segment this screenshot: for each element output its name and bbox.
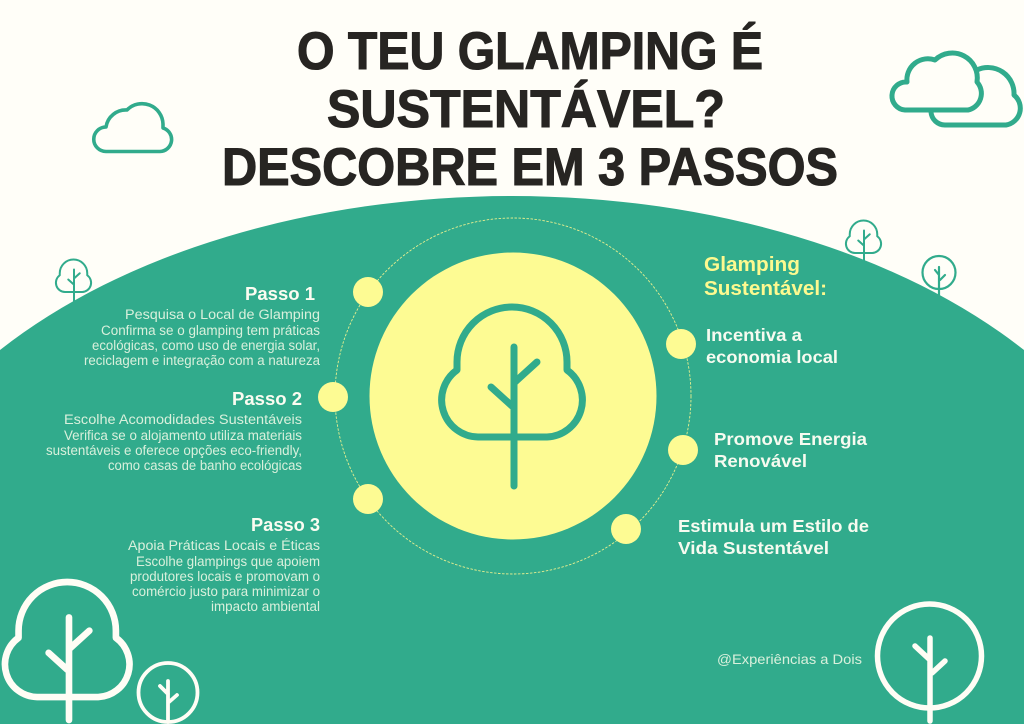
text block: passo 3: impacto ambiental xyxy=(211,599,320,614)
text block: passo 2: como casas de banho ecológicas xyxy=(108,458,302,473)
text block: passo 2: Verifica se o alojamento utiliza materiais xyxy=(64,428,302,443)
icon: small tree on hill left xyxy=(56,260,91,304)
text block: passo 1 xyxy=(84,284,320,368)
benefit: economia local: Incentiva a xyxy=(706,325,802,345)
icon: round tree on hill right xyxy=(922,256,956,297)
text block: passo 2: Escolhe Acomodidades Sustentáveis xyxy=(64,412,302,427)
benefit: energia renovável: Promove Energia xyxy=(714,429,867,449)
step markers xyxy=(318,277,383,514)
icon: small round tree bottom left xyxy=(138,663,198,722)
benefit: energia renovável: Renovável xyxy=(714,451,807,471)
benefit: estilo de vida: Estimula um Estilo de xyxy=(678,516,869,536)
benefit: estilo de vida: Vida Sustentável xyxy=(678,538,829,558)
benefit: energia renovável xyxy=(714,429,867,471)
text block: passo 1: Passo 1 xyxy=(245,284,315,304)
title: O TEU GLAMPING É xyxy=(297,21,763,81)
yellow central circle xyxy=(370,252,656,540)
text block: passo 1: reciclagem e integração com a natureza xyxy=(84,353,320,368)
text block: passo 3: comércio justo para minimizar o xyxy=(132,584,320,599)
icon: central tree xyxy=(442,307,582,486)
benefit: estilo de vida xyxy=(678,516,869,558)
icon: small cloud left xyxy=(94,104,172,152)
dotted ring xyxy=(335,218,691,574)
text block: passo 3: Escolhe glampings que apoiem xyxy=(136,554,320,569)
title xyxy=(222,21,838,197)
icon: double cloud right xyxy=(892,53,1020,125)
text block: passo 3 xyxy=(128,515,320,614)
title: DESCOBRE EM 3 PASSOS xyxy=(222,138,838,197)
text block: passo 1: ecológicas, como uso de energia solar, xyxy=(92,338,320,353)
text block: passo 3: Apoia Práticas Locais e Éticas xyxy=(128,538,320,553)
text block: passo 2 xyxy=(46,389,302,473)
benefit markers xyxy=(611,329,698,544)
heading: glamping sustentável: Glamping xyxy=(704,254,800,276)
text block: passo 1: Confirma se o glamping tem práticas xyxy=(101,323,320,338)
icon: small tree on hill right xyxy=(846,220,881,265)
benefit: economia local xyxy=(706,325,838,367)
title: SUSTENTÁVEL? xyxy=(327,79,725,139)
icon: large round tree bottom right xyxy=(878,604,982,721)
text block: passo 2: sustentáveis e oferece opções eco-friendly, xyxy=(46,443,302,458)
text block: passo 3: produtores locais e promovam o xyxy=(130,569,320,584)
heading: glamping sustentável: Sustentável: xyxy=(704,278,827,300)
credit: @Experiências a Dois xyxy=(717,651,862,667)
icon: large tree bottom left xyxy=(5,582,130,720)
benefit: economia local: economia local xyxy=(706,347,838,367)
text block: passo 1: Pesquisa o Local de Glamping xyxy=(125,307,320,322)
green hill xyxy=(0,196,1024,724)
heading: glamping sustentável xyxy=(704,254,827,300)
text block: passo 2: Passo 2 xyxy=(232,389,302,409)
text block: passo 3: Passo 3 xyxy=(251,515,320,535)
